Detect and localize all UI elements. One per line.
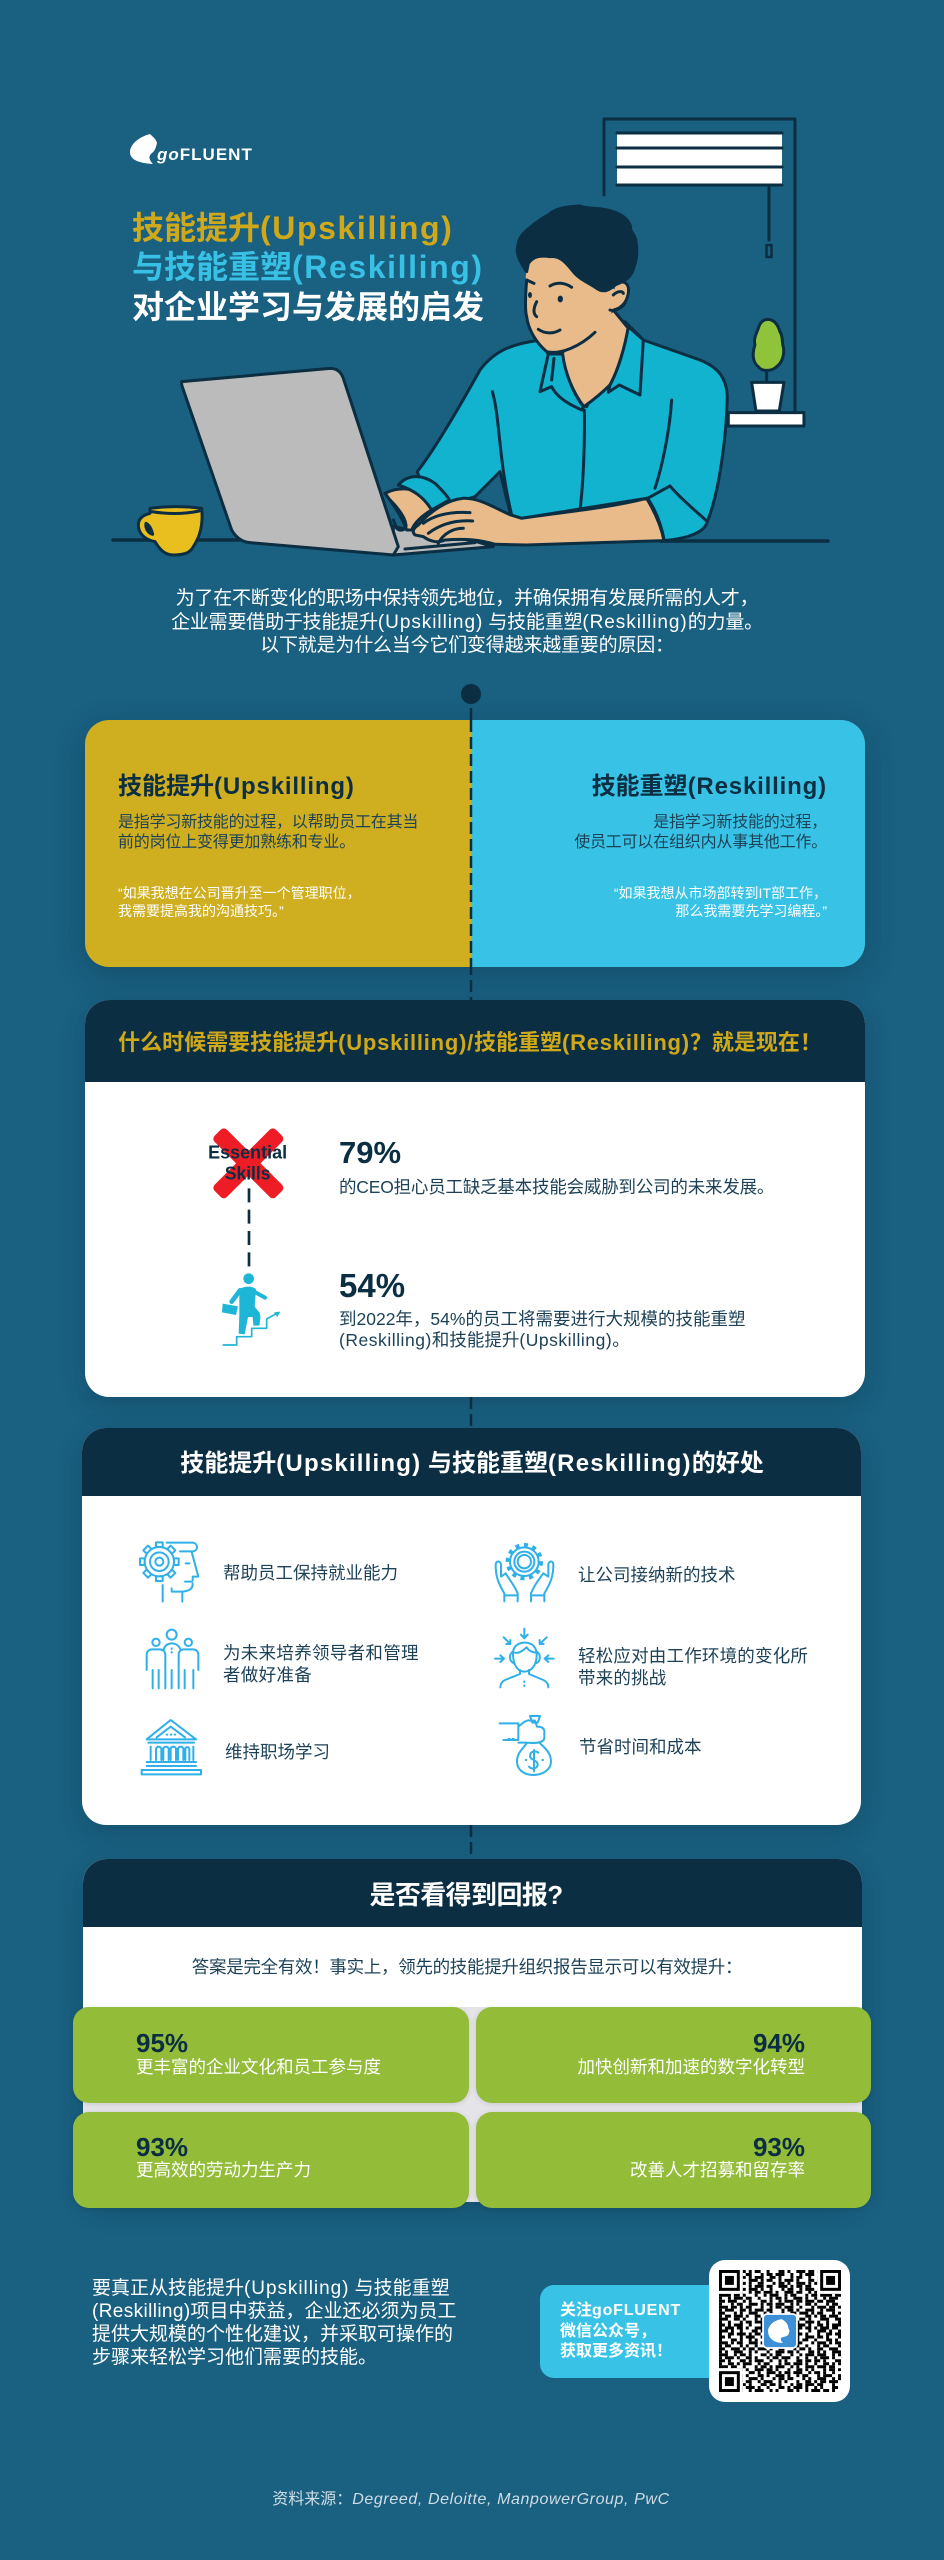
window with blind — [604, 119, 795, 412]
quote: reskilling — [614, 885, 827, 918]
definition: reskilling: 使员工可以在组织内从事其他工作。 — [574, 834, 827, 850]
card: 93% productivity — [73, 2112, 469, 2208]
heading: upskilling: 技能提升(Upskilling) — [118, 773, 355, 800]
card: 93% productivity: 更高效的劳动力生产力 — [136, 2160, 311, 2180]
stat: 54%: 54% — [339, 1267, 405, 1304]
card: 94%: 94% — [753, 2028, 805, 2058]
conclusion text: 要真正从技能提升(Upskilling) 与技能重塑 — [92, 2278, 450, 2299]
definition: upskilling: 前的岗位上变得更加熟练和专业。 — [118, 834, 355, 850]
definition: reskilling: 是指学习新技能的过程， — [653, 814, 827, 831]
card: 93% recruitment: 93% — [753, 2132, 805, 2162]
quote: reskilling: 那么我需要先学习编程。” — [675, 902, 827, 918]
desk line — [113, 540, 828, 541]
coffee cup — [138, 507, 202, 555]
conclusion text: 提供大规模的个性化建议，并采取可操作的 — [92, 2324, 453, 2345]
stat text: CEO: 的CEO担心员工缺乏基本技能会威胁到公司的未来发展。 — [339, 1177, 774, 1197]
card: 95%: 95% — [136, 2028, 188, 2058]
heading: when: 什么时候需要技能提升(Upskilling)/技能重塑(Reskilling)？就是现在！ — [118, 1030, 822, 1055]
quote: reskilling: “如果我想从市场部转到IT部工作， — [614, 885, 827, 901]
man — [385, 206, 727, 545]
QR code — [709, 2260, 850, 2402]
card: 94%: 加快创新和加速的数字化转型 — [578, 2057, 805, 2077]
benefit: new technology: 让公司接纳新的技术 — [578, 1565, 736, 1585]
card: 95%: 更丰富的企业文化和员工参与度 — [136, 2057, 381, 2077]
icon: crossed essential skills and climbing figure: Skills — [225, 1164, 271, 1184]
laptop — [182, 368, 493, 555]
plant on shelf — [728, 319, 804, 426]
title: 技能提升(Upskilling) — [132, 210, 453, 246]
benefit: handling change: 轻松应对由工作环境的变化所 — [578, 1646, 808, 1666]
benefit: time and cost: 节省时间和成本 — [579, 1737, 702, 1757]
definition: reskilling — [574, 813, 827, 850]
definition: upskilling: 是指学习新技能的过程，以帮助员工在其当 — [118, 814, 418, 831]
panel: upskilling vs reskilling — [85, 720, 865, 967]
benefit: workplace learning: 维持职场学习 — [225, 1742, 330, 1762]
card: 93% recruitment: 改善人才招募和留存率 — [630, 2160, 805, 2180]
panel: when is it needed — [85, 1000, 865, 1397]
callout: follow on WeChat: 获取更多资讯！ — [560, 2343, 672, 2360]
icon: crossed essential skills and climbing figure — [208, 1128, 287, 1346]
stat: 79%: 79% — [339, 1135, 401, 1170]
illustration: man at laptop with window and plant — [111, 118, 830, 556]
card: 93% productivity: 93% — [136, 2132, 188, 2162]
panel: benefits — [82, 1428, 861, 1825]
callout: follow on WeChat: 关注goFLUENT — [560, 2302, 681, 2319]
intro text: 以下就是为什么当今它们变得越来越重要的原因： — [260, 635, 674, 656]
definition: upskilling — [118, 813, 418, 850]
quote: upskilling: 我需要提高我的沟通技巧。” — [118, 902, 284, 918]
title: 与技能重塑(Reskilling) — [132, 249, 484, 285]
benefit: handling change — [578, 1646, 808, 1688]
conclusion text: 步骤来轻松学习他们需要的技能。 — [92, 2347, 377, 2368]
intro text: 为了在不断变化的职场中保持领先地位，并确保拥有发展所需的人才， — [176, 588, 758, 609]
quote: upskilling — [118, 885, 361, 918]
icons: right column — [494, 1543, 555, 1776]
conclusion text — [92, 2278, 457, 2368]
benefit: employability: 帮助员工保持就业能力 — [223, 1563, 398, 1583]
panel: return on investment — [72, 1859, 872, 2214]
text: answer: 答案是完全有效！事实上，领先的技能提升组织报告显示可以有效提升： — [192, 1957, 742, 1977]
title: 对企业学习与发展的启发 — [132, 289, 484, 325]
benefit: leaders — [223, 1643, 419, 1684]
icon: crossed essential skills and climbing figure: Essential — [208, 1143, 287, 1163]
quote: upskilling: “如果我想在公司晋升至一个管理职位， — [118, 885, 361, 901]
stat text: 2022 — [339, 1309, 745, 1350]
icons: left column — [139, 1541, 202, 1776]
title — [132, 210, 484, 325]
benefit: leaders: 者做好准备 — [223, 1664, 312, 1684]
callout: follow on WeChat — [540, 2285, 720, 2378]
benefit: leaders: 为未来培养领导者和管理 — [223, 1643, 419, 1663]
callout: follow on WeChat: 微信公众号， — [560, 2322, 656, 2340]
intro text: 企业需要借助于技能提升(Upskilling) 与技能重塑(Reskilling)的力量。 — [171, 612, 763, 632]
logo: goFLUENT: goFLUENT — [157, 145, 253, 164]
heading: benefits: 技能提升(Upskilling) 与技能重塑(Reskilling)的好处 — [180, 1450, 764, 1477]
stat text: 2022: 到2022年，54%的员工将需要进行大规模的技能重塑 — [339, 1309, 745, 1329]
benefit: handling change: 带来的挑战 — [578, 1668, 666, 1688]
logo: goFLUENT — [130, 134, 253, 164]
card: 94% — [476, 2007, 871, 2103]
heading: ROI: 是否看得到回报? — [369, 1880, 563, 1910]
card: 95% — [73, 2007, 469, 2103]
card: 93% recruitment — [476, 2112, 871, 2208]
stat text: 2022: (Reskilling)和技能提升(Upskilling)。 — [339, 1330, 630, 1350]
intro text — [171, 588, 763, 656]
conclusion text: (Reskilling)项目中获益，企业还必须为员工 — [92, 2301, 457, 2322]
sources: 资料来源：Degreed, Deloitte, ManpowerGroup, PwC — [272, 2491, 670, 2508]
heading: reskilling: 技能重塑(Reskilling) — [592, 773, 827, 800]
